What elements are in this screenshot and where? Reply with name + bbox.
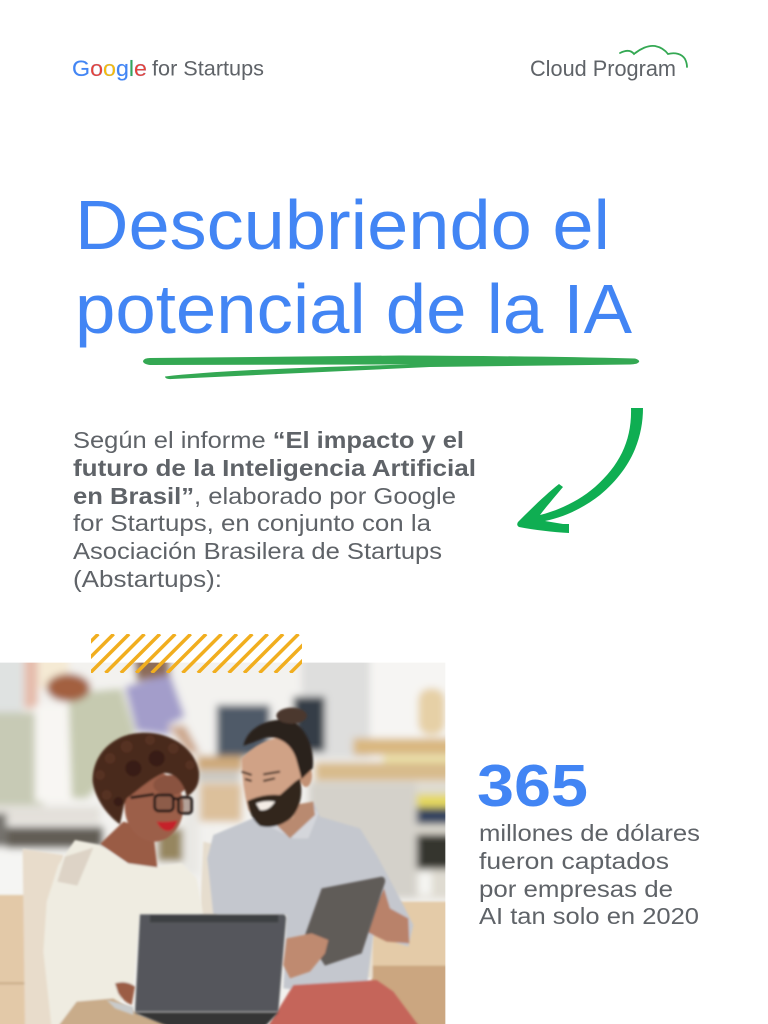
smile: [157, 820, 177, 831]
logo: Google for Startups: [72, 56, 264, 81]
icon: cloud outline: [620, 46, 687, 67]
man: [207, 708, 421, 1024]
intro paragraph: futuro de la Inteligencia Artificial: [73, 455, 476, 481]
curved arrow: [517, 408, 643, 533]
forearm: [367, 888, 409, 943]
laptop and tablet: [107, 877, 385, 1024]
statistic description: por empresas de: [479, 876, 673, 902]
intro paragraph: (Abstartups):: [73, 566, 222, 592]
woman: [43, 733, 203, 1024]
intro paragraph: Según el informe “El impacto y el: [73, 427, 464, 453]
glasses: [131, 794, 192, 813]
statistic description: [479, 820, 700, 929]
blouse: [43, 840, 203, 1024]
title: Descubriendo el: [75, 186, 610, 264]
curly hair: [93, 733, 199, 824]
intro paragraph: [73, 427, 476, 592]
title: [75, 186, 632, 348]
shirt: [207, 802, 413, 993]
statistic description: AI tan solo en 2020: [479, 903, 699, 929]
logo: Cloud Program: Cloud Program: [530, 56, 676, 81]
neck and face: [100, 822, 160, 867]
logo: Google for Startups: Google: [72, 56, 147, 81]
photo: two colleagues with laptop and tablet: [0, 652, 463, 1024]
statistic: 365 million dollars: [477, 753, 700, 929]
hair and bun: [243, 720, 313, 779]
neck and face: [277, 802, 315, 838]
logo: Google for Startups: for Startups: [152, 58, 264, 80]
intro paragraph: en Brasil” , elaborado por Google: [73, 483, 456, 509]
yellow hatched accent: [91, 634, 302, 673]
green underline stroke: [143, 356, 639, 379]
intro paragraph: for Startups, en conjunto con la: [73, 510, 431, 536]
sofa and wooden boxes: [0, 842, 450, 1024]
title: potencial de la IA: [75, 270, 632, 348]
statistic description: fueron captados: [479, 848, 669, 874]
office background: [0, 652, 463, 1024]
number: 365: [477, 753, 588, 819]
statistic description: millones de dólares: [479, 820, 700, 846]
intro paragraph: Asociación Brasilera de Startups: [73, 538, 442, 564]
logo: Cloud Program: [530, 46, 687, 81]
eyes and brows: [242, 772, 280, 781]
beard: [247, 778, 301, 827]
